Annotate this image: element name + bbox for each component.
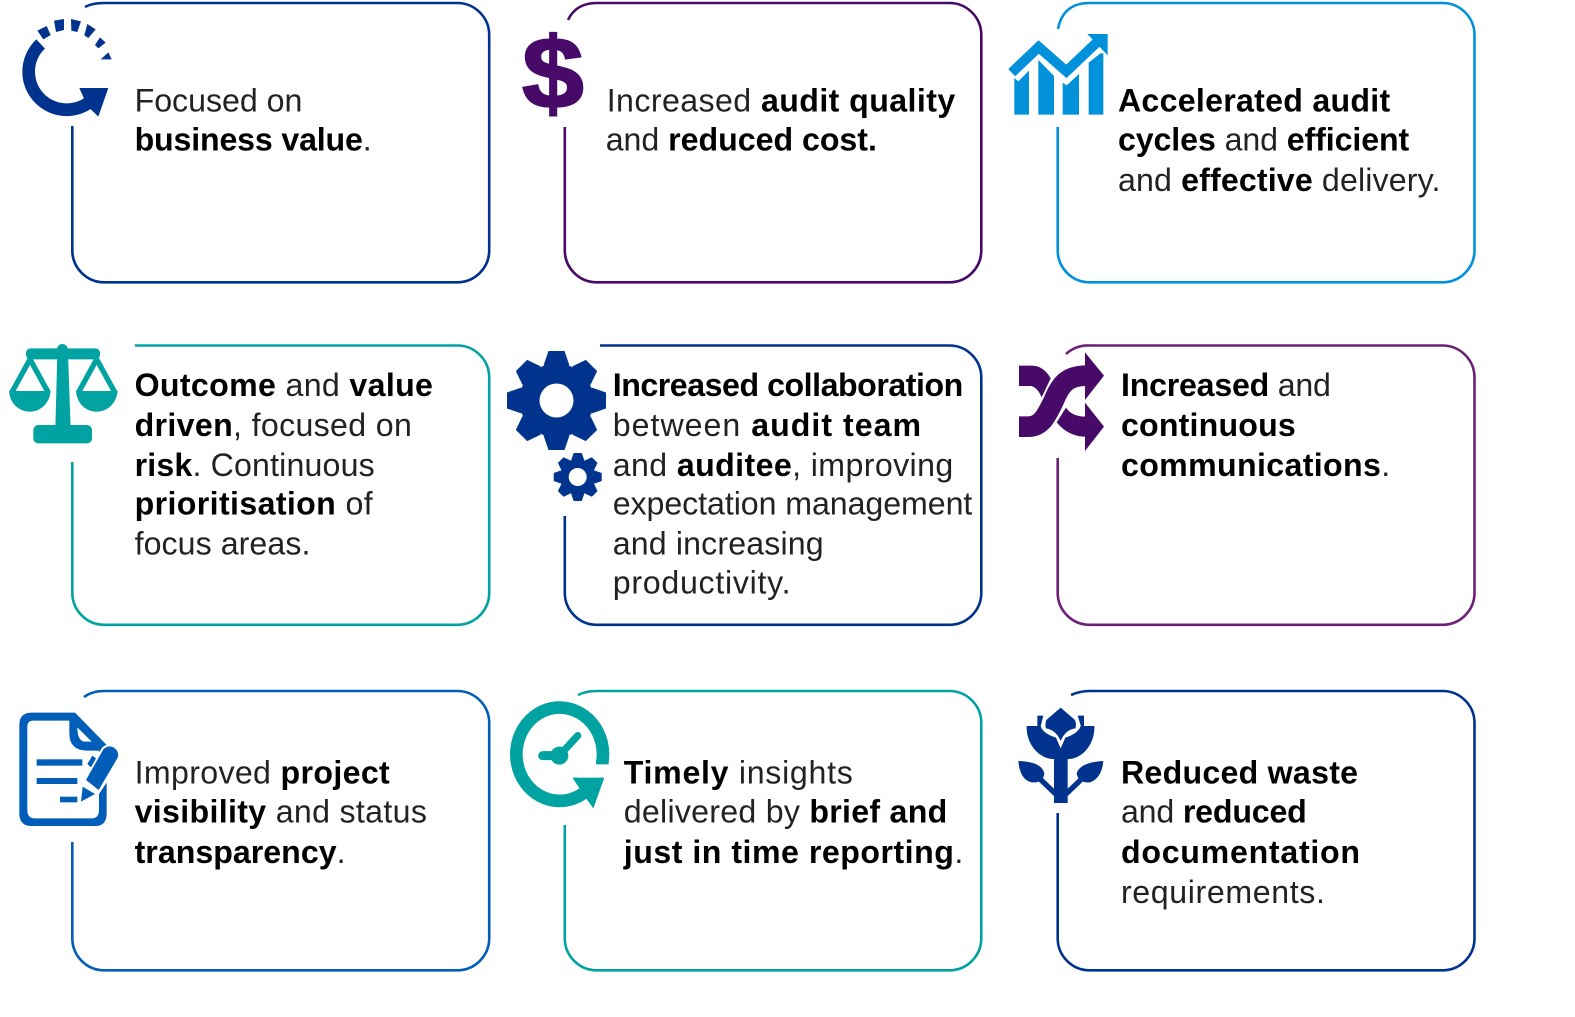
icon: balance scales [9, 344, 118, 443]
icon: large gear [507, 351, 606, 450]
text: accelerated cycles [1118, 82, 1440, 198]
panel: outcome and value driven [9, 344, 489, 625]
icon: shuffle arrows [1019, 352, 1104, 451]
icon: dollar sign: $ [522, 18, 584, 130]
icon: flower [1018, 708, 1103, 803]
text: accelerated cycles: and effective delivery. [1118, 162, 1440, 198]
text: audit quality [606, 82, 955, 158]
text: outcome driven [135, 367, 433, 561]
text: project visibility [135, 754, 427, 870]
text: reduced waste: and reduced [1121, 794, 1307, 830]
icon: circular progress arrow [29, 19, 112, 117]
text: reduced waste: requirements. [1121, 874, 1325, 910]
text: communications: Increased and [1121, 367, 1331, 403]
text: audit quality: and reduced cost. [606, 122, 877, 158]
text: collaboration: and auditee, improving [613, 447, 953, 483]
text: collaboration: and increasing [613, 525, 824, 561]
text: accelerated cycles: cycles and efficient [1118, 122, 1410, 158]
text: outcome driven: driven, focused on [135, 407, 412, 443]
text: communications [1121, 367, 1390, 483]
text: accelerated cycles: Accelerated audit [1118, 82, 1390, 118]
panel: timely insights [516, 691, 981, 970]
text: focused on business value: business value. [135, 122, 372, 158]
text: outcome driven: prioritisation of [135, 485, 373, 521]
text: collaboration: between audit team [613, 407, 921, 443]
text: reduced waste: documentation [1121, 834, 1360, 870]
text: timely insights: delivered by brief and [624, 794, 947, 830]
text: project visibility: visibility and status [135, 794, 427, 830]
text: timely insights: Timely insights [624, 754, 853, 790]
text: collaboration: expectation management [613, 485, 972, 521]
text: communications: communications. [1121, 447, 1390, 483]
text: collaboration: productivity. [613, 565, 791, 601]
panel: increased collaboration [507, 346, 981, 625]
text: reduced waste [1121, 754, 1360, 910]
panel: continuous communications [1019, 345, 1474, 625]
text: focused on business value [135, 82, 372, 158]
icon: rising bar chart [1012, 34, 1108, 115]
text: focused on business value: Focused on [135, 82, 302, 118]
text: outcome driven: Outcome and value [135, 367, 433, 403]
text: collaboration [613, 367, 972, 601]
text: timely insights: just in time reporting. [623, 834, 963, 870]
text: timely insights [623, 754, 963, 870]
text: outcome driven: risk. Continuous [135, 447, 375, 483]
panel: accelerated audit cycles [1012, 3, 1474, 282]
text: collaboration: Increased collaboration [613, 367, 963, 403]
text: project visibility: transparency. [135, 834, 346, 870]
panel: project visibility [19, 691, 489, 970]
text: communications: continuous [1121, 407, 1296, 443]
panel: audit quality and cost [522, 3, 981, 282]
icon: small gear [554, 453, 602, 501]
icon: document with pencil [19, 713, 118, 826]
text: outcome driven: focus areas. [135, 525, 310, 561]
text: project visibility: Improved project [135, 754, 390, 790]
panel: reduced waste [1018, 691, 1474, 970]
panel: business value [29, 3, 489, 282]
icon: clock with arrow [516, 708, 604, 808]
text: audit quality: Increased audit quality [607, 82, 955, 118]
text: reduced waste: Reduced waste [1121, 754, 1358, 790]
